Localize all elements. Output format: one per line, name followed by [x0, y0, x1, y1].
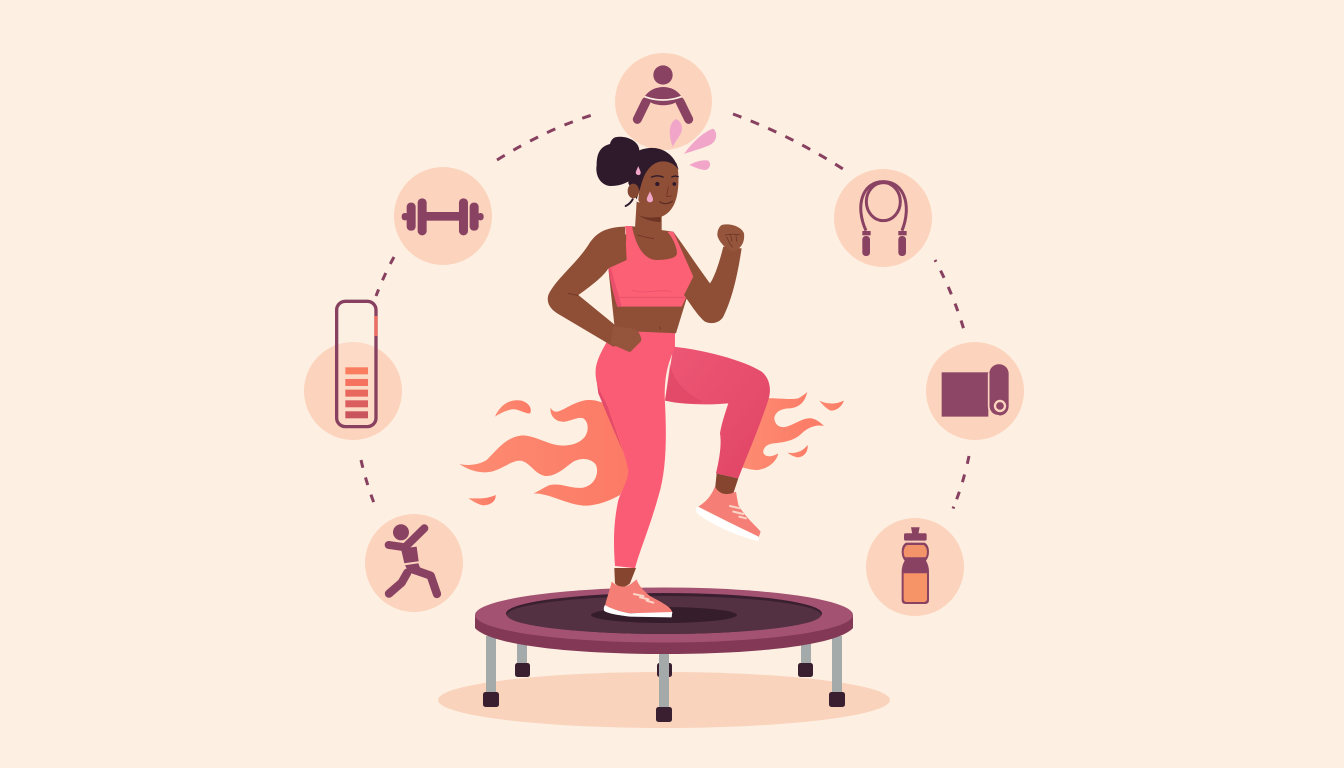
- right flame: [742, 392, 824, 470]
- frame side: [475, 615, 853, 654]
- frame top: [475, 588, 853, 642]
- left flame: [459, 400, 632, 506]
- icon: battery level gauge: [304, 301, 402, 440]
- sweat droplets above the head: [670, 119, 716, 170]
- icon: top sumo squat figure: [615, 53, 712, 150]
- back legs: [515, 640, 813, 677]
- face: [628, 176, 679, 204]
- standing foot: [604, 568, 672, 617]
- icon: rolled yoga mat: [926, 342, 1024, 440]
- flames: [459, 392, 844, 506]
- upper body: [548, 137, 744, 352]
- flame sparks: [468, 400, 844, 505]
- sports bra: [608, 226, 693, 307]
- face base: [638, 159, 678, 217]
- woman figure: [548, 137, 770, 617]
- icon: water bottle: [866, 518, 964, 616]
- front legs: [483, 636, 845, 722]
- left arm, hand on hip: [548, 227, 642, 352]
- standing leg: [596, 330, 675, 568]
- dashed ring connecting the icons: [361, 114, 969, 511]
- mat: [506, 593, 822, 634]
- trampoline: [475, 588, 853, 722]
- icon: jumping figure: [365, 514, 463, 612]
- hair: [596, 137, 679, 206]
- sweat on face: [636, 166, 653, 202]
- icon: jump rope: [834, 169, 932, 267]
- right arm and fist: [673, 224, 744, 323]
- torso and neck: [608, 202, 693, 333]
- icon: dumbbell: [394, 167, 492, 265]
- raised leg and foot: [665, 347, 770, 541]
- ground shadow: [438, 672, 890, 728]
